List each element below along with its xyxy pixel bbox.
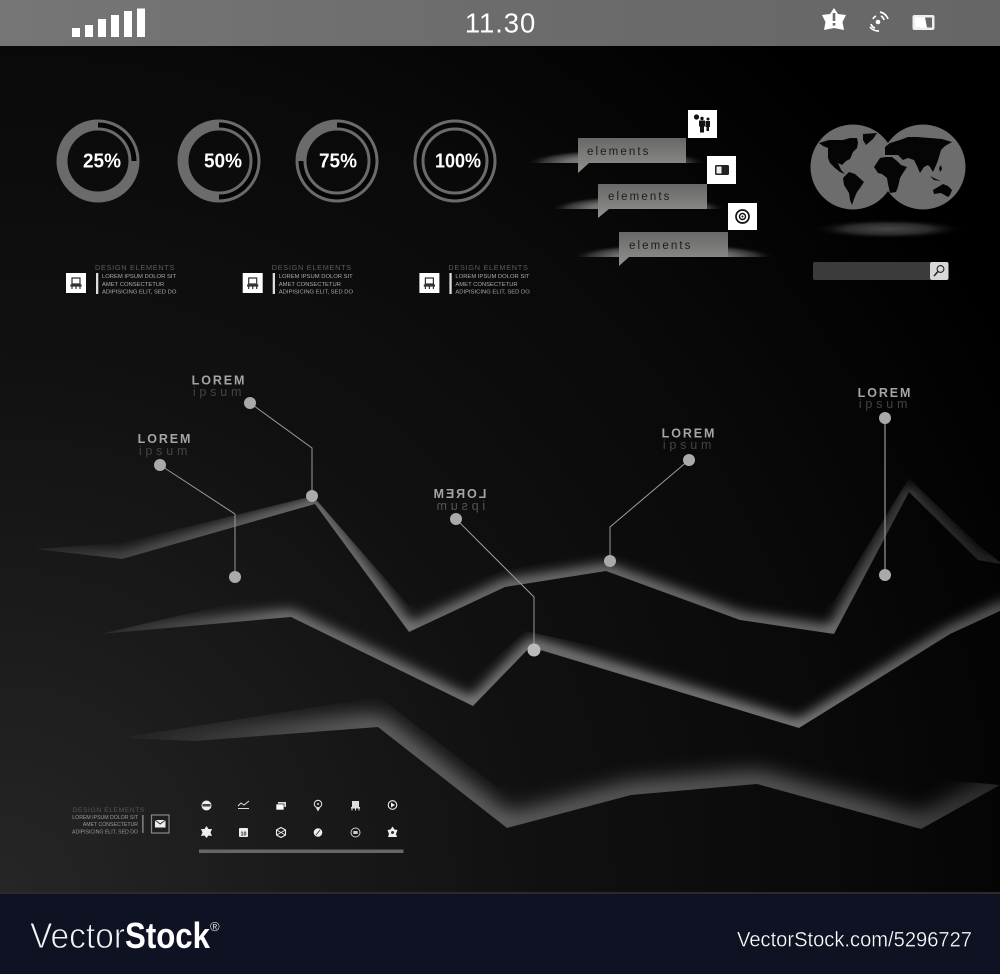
band 2 <box>90 606 1000 728</box>
callout 2: LOREM <box>192 374 246 388</box>
speech label 2: elements <box>608 191 671 203</box>
land masses <box>819 133 952 205</box>
logo: ® <box>210 919 220 934</box>
icon: signal strength bars <box>72 8 145 37</box>
text block: design elements 3: LOREM IPSUM DOLOR SIT <box>455 274 530 280</box>
shadow under globes <box>810 219 966 239</box>
icon: burst <box>201 826 212 838</box>
text block: design elements 1: AMET CONSECTETUR <box>102 282 164 288</box>
callout 3 mirrored: LOREM <box>432 487 486 501</box>
logo: Vector <box>30 915 125 956</box>
logo: Stock <box>125 915 211 956</box>
icon: people <box>688 110 717 138</box>
footer <box>0 892 1000 974</box>
band 3 <box>110 727 1000 829</box>
text block: bottom design elements: ADIPISICING ELIT, SED DO <box>72 830 138 836</box>
image id url: VectorStock.com/5296727 <box>737 928 972 952</box>
ring gauge: 100%: 100% <box>435 150 481 172</box>
icon: play <box>388 801 397 809</box>
icon: percent disc <box>314 828 322 837</box>
ring gauge: 100% <box>419 125 491 197</box>
icon: hexagon cube <box>276 828 286 838</box>
callout 1: ipsum <box>139 444 191 458</box>
text block: design elements 3 <box>419 263 530 296</box>
icon: message ring <box>351 828 360 837</box>
ring gauge: 25%: 25% <box>83 150 121 172</box>
ring gauge: 25% <box>62 125 134 197</box>
text block: design elements 2: AMET CONSECTETUR <box>279 282 341 288</box>
search bar <box>813 262 948 280</box>
icon: battery <box>912 15 934 30</box>
speech label 3: elements <box>629 240 692 252</box>
band 1 <box>20 492 1000 634</box>
speech label 1 <box>533 110 717 173</box>
speech label 2 <box>557 156 736 218</box>
text block: bottom design elements: DESIGN ELEMENTS <box>72 807 145 814</box>
ring gauge: 50%: 50% <box>204 150 242 172</box>
icon grid rule <box>199 850 404 853</box>
speech label 1: elements <box>587 146 650 158</box>
callout 3 mirrored <box>432 487 540 656</box>
callout 5: ipsum <box>859 397 911 411</box>
text block: design elements 1: ADIPISICING ELIT, SED DO <box>102 290 177 296</box>
clock: 11.30 <box>465 8 536 38</box>
callout 5 <box>858 386 912 581</box>
ring gauge: 75%: 75% <box>319 150 357 172</box>
text block: design elements 1: DESIGN ELEMENTS <box>95 263 175 272</box>
icon grid <box>201 800 398 838</box>
callout 4: LOREM <box>662 426 716 440</box>
icon: table <box>351 801 360 810</box>
text block: design elements 3: AMET CONSECTETUR <box>455 282 518 288</box>
wave chart: layered bands <box>20 492 1000 829</box>
status bar <box>0 0 1000 46</box>
icon: alert star <box>822 8 846 30</box>
icon: badge <box>202 800 212 810</box>
icon: location pin <box>314 800 322 812</box>
callout 5: LOREM <box>858 386 912 400</box>
text block: design elements 2: ADIPISICING ELIT, SED DO <box>279 290 354 296</box>
icon: star house <box>388 826 398 837</box>
callout 4 <box>604 426 716 567</box>
callout 1 <box>138 432 241 583</box>
text block: design elements 2: DESIGN ELEMENTS <box>272 263 352 272</box>
text block: bottom design elements: AMET CONSECTETUR <box>83 822 138 828</box>
text block: design elements 1 <box>66 263 177 296</box>
icon: target <box>728 203 757 230</box>
callout 2 <box>192 374 318 502</box>
speech label 3 <box>580 203 768 266</box>
callout 3 mirrored: ipsum <box>433 499 485 513</box>
logo <box>30 915 220 956</box>
text block: design elements 3: ADIPISICING ELIT, SED DO <box>455 290 530 296</box>
icon: calendar <box>239 828 248 838</box>
callout 4: ipsum <box>663 438 715 452</box>
text block: bottom design elements <box>72 807 169 836</box>
callout 2: ipsum <box>193 385 245 399</box>
ring gauge: 75% <box>301 125 373 197</box>
text block: design elements 2 <box>243 263 354 296</box>
ring gauge: 50% <box>183 125 255 197</box>
world map globes <box>810 124 966 239</box>
icon: line chart <box>238 801 249 809</box>
icon: battery card <box>707 156 736 184</box>
text block: design elements 3: DESIGN ELEMENTS <box>448 263 529 272</box>
icon: calendar: 10 <box>240 832 247 838</box>
icon: envelope box <box>152 815 169 833</box>
text block: bottom design elements: LOREM IPSUM DOLOR SIT <box>72 815 139 821</box>
text block: design elements 1: LOREM IPSUM DOLOR SIT <box>102 274 176 280</box>
text block: design elements 2: LOREM IPSUM DOLOR SIT <box>279 274 353 280</box>
icon: chat <box>276 802 286 810</box>
callout 1: LOREM <box>138 432 192 446</box>
icon: wireless signal <box>870 12 888 31</box>
